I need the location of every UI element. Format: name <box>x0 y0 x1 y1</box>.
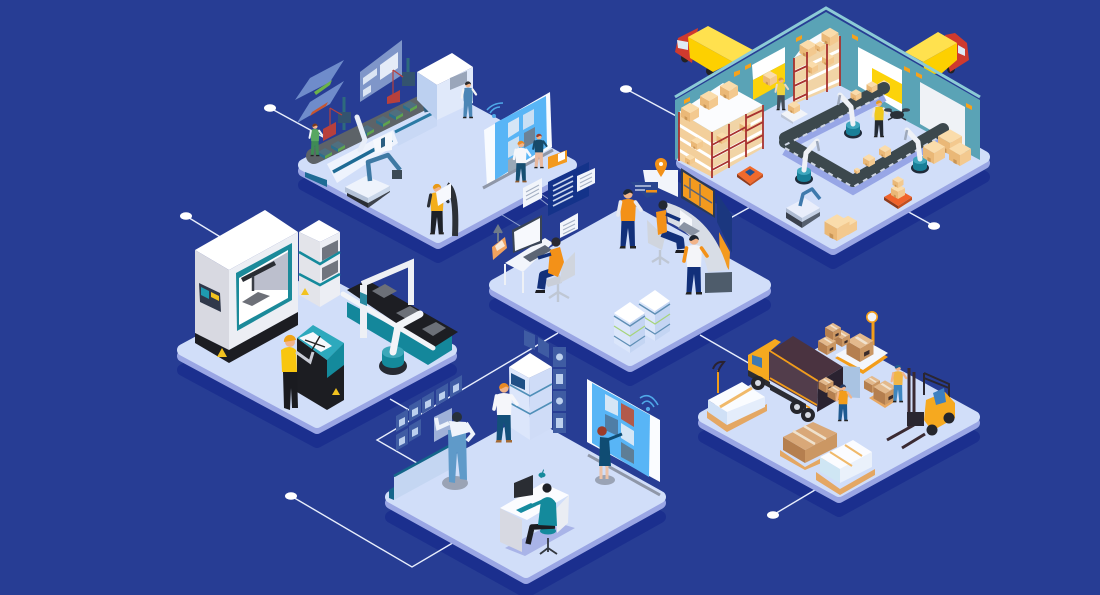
weighing scale with parcels <box>818 312 888 374</box>
stacked control units <box>299 220 340 307</box>
worker with pallet boxes <box>864 365 906 408</box>
server tower <box>509 353 552 440</box>
tablet wall <box>483 92 553 188</box>
warehouse robot arms <box>795 95 929 184</box>
drone <box>884 108 910 120</box>
rack: front shelves with boxes <box>679 81 763 178</box>
platform shadows <box>183 91 984 592</box>
engineer and colleague at tablet <box>514 134 547 182</box>
seated operator right <box>647 200 685 265</box>
warehouse workers <box>776 78 887 137</box>
platform: production line <box>295 40 571 243</box>
robot arms over line <box>323 58 427 150</box>
white pallet load left <box>707 382 767 432</box>
forklift <box>887 368 955 448</box>
conveyor parcels <box>850 81 891 174</box>
icon panels left <box>396 375 462 451</box>
rack: rear shelves <box>794 28 840 104</box>
robot arm at conveyor <box>379 314 420 375</box>
assembly conveyor <box>305 100 437 187</box>
floating cards and envelope <box>492 150 595 260</box>
parcel scale <box>781 101 808 124</box>
pallet jack handle <box>713 362 724 393</box>
AGV with cartons <box>884 176 912 209</box>
map screen with location pin <box>630 158 678 198</box>
floating data panels <box>295 40 402 123</box>
curved control desk <box>665 202 732 293</box>
server stacks <box>614 290 670 353</box>
control console <box>297 325 344 410</box>
seated operator left <box>535 237 575 302</box>
floor cartons <box>824 214 857 241</box>
large tablet <box>587 379 660 482</box>
operator at machine <box>462 81 476 118</box>
desk with monitor <box>505 215 553 293</box>
stacked cartons right <box>923 129 971 166</box>
engineer in overalls <box>436 412 473 490</box>
3D printer cabinet <box>195 210 298 363</box>
white carton pallet <box>816 440 875 495</box>
office desk <box>500 475 575 556</box>
CNC machine <box>417 53 473 120</box>
warehouse walls <box>675 8 980 160</box>
platform: warehouse <box>675 8 984 249</box>
delivery truck left behind warehouse <box>675 26 753 76</box>
wifi icon <box>487 103 503 117</box>
connector lines <box>180 85 940 567</box>
seated engineer at desk <box>522 470 557 554</box>
control wall screens <box>681 168 732 270</box>
brown pallet load <box>780 422 838 470</box>
engineer at server <box>494 383 517 442</box>
engineer in green vest <box>310 124 322 156</box>
worker unloading truck <box>837 384 851 421</box>
delivery truck right behind warehouse <box>905 32 969 75</box>
wifi icon on tablet <box>640 396 658 410</box>
conveyor with gantry <box>343 263 458 365</box>
rover arm robot <box>786 189 820 228</box>
conveyor loop <box>785 88 943 189</box>
woman at tablet <box>588 426 660 495</box>
worker with hard hat and pipe <box>428 183 455 236</box>
platform: digital twin office <box>389 330 660 578</box>
icon panels right of server <box>524 330 566 433</box>
platform: control room <box>492 150 765 366</box>
platform: logistics yard <box>704 312 974 497</box>
operator in yellow <box>281 335 313 410</box>
standing operator at console <box>684 235 707 294</box>
delivery truck <box>748 336 860 422</box>
platform: additive manufacturing <box>183 210 458 428</box>
standing analyst <box>618 189 641 248</box>
orange AGV <box>737 166 763 186</box>
low partition <box>389 446 449 500</box>
rover arm <box>345 155 402 208</box>
